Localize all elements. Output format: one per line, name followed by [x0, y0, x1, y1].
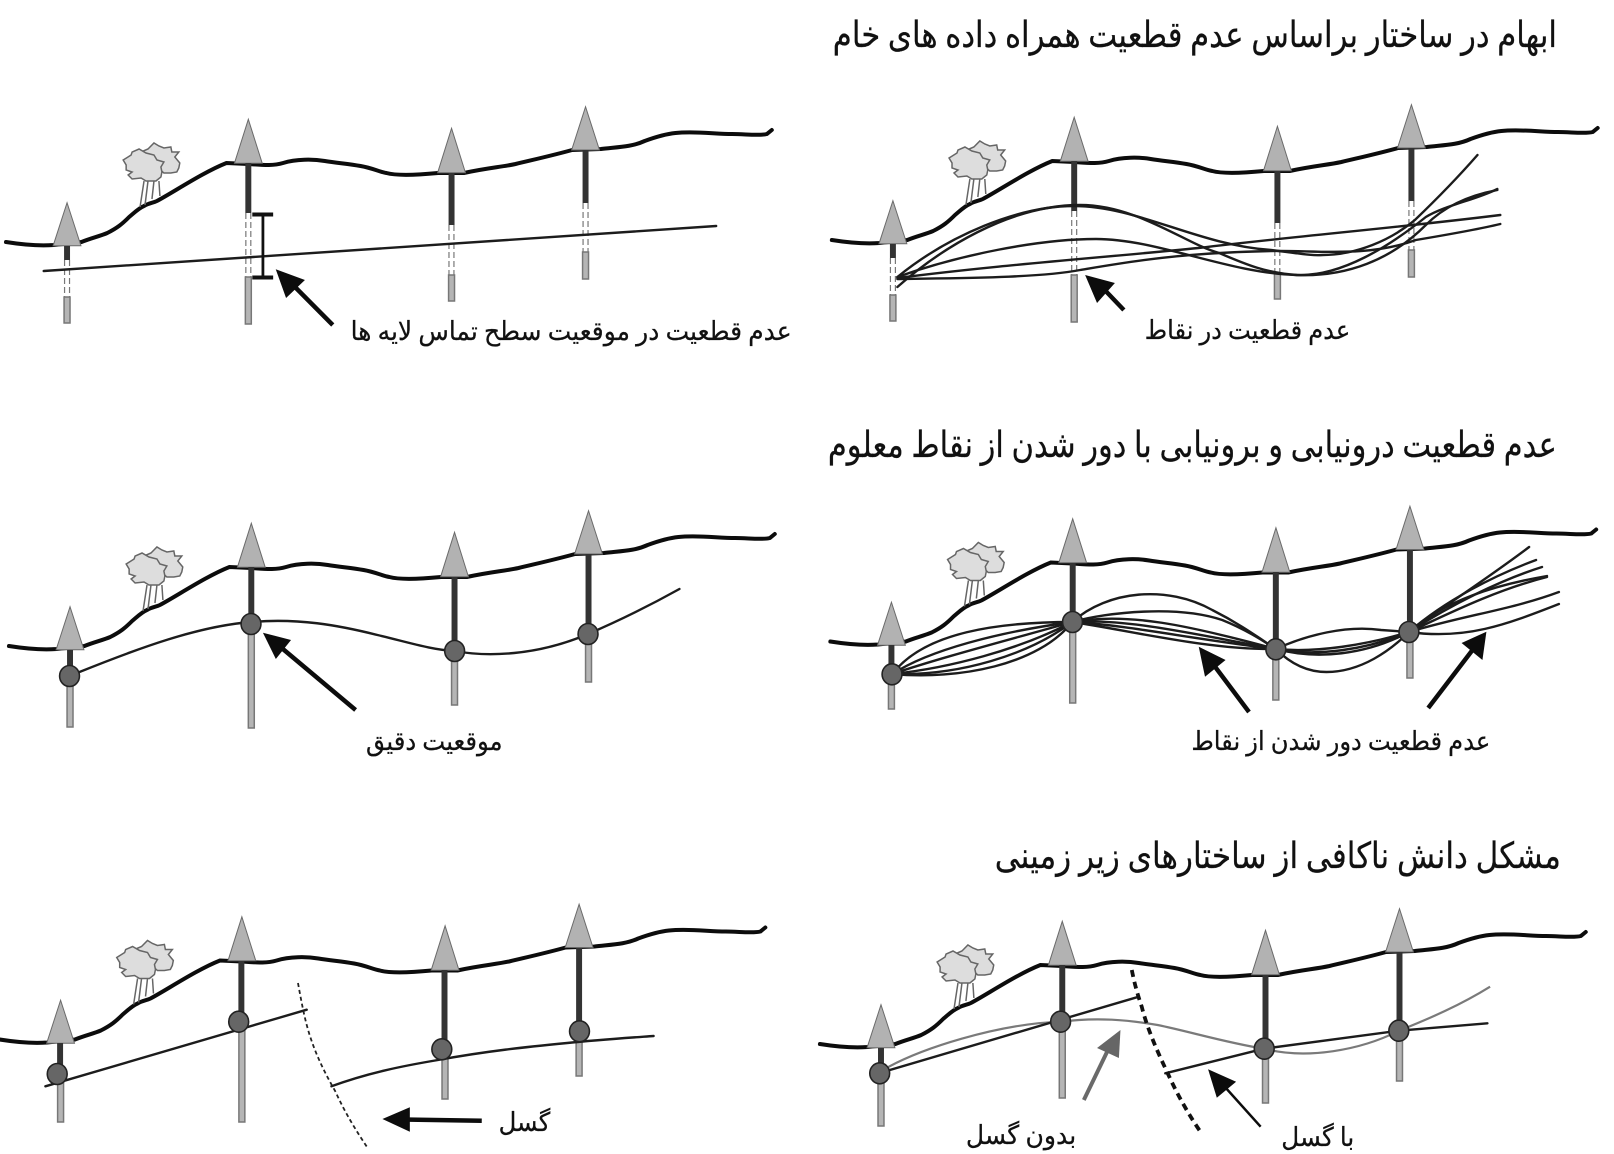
terrain with tree and survey markers	[820, 909, 1586, 1048]
arrow to point uncertainty	[1085, 275, 1124, 310]
terrain with tree and survey markers	[9, 511, 775, 650]
label: fault: گسل	[499, 1107, 551, 1137]
fault line	[298, 983, 367, 1147]
arrow to extrapolation spread	[1428, 632, 1486, 708]
possible interpretation curves	[897, 155, 1500, 287]
arrow to error bar	[276, 269, 333, 325]
horizon segment right of fault	[331, 1036, 654, 1086]
arrow to interpolation spread	[1199, 647, 1249, 712]
panel: uncertainty at points	[832, 105, 1598, 345]
gray curve without fault	[880, 987, 1490, 1072]
panel: uncertainty in contact surface position	[6, 107, 792, 347]
contact surface line	[44, 226, 716, 271]
error bar stem	[262, 214, 264, 278]
arrow to fault	[382, 1107, 482, 1132]
label: without fault: بدون گسل	[966, 1120, 1076, 1151]
terrain with tree and survey markers	[0, 904, 765, 1043]
black line with fault, left of fault	[880, 997, 1137, 1073]
black line with fault, right of fault	[1165, 1023, 1487, 1073]
arrow to exact position	[263, 633, 356, 710]
terrain with tree and survey markers	[832, 105, 1598, 244]
label: uncertainty moving away from points: عدم قطعیت دور شدن از نقاط	[1191, 727, 1490, 757]
terrain with tree and survey markers	[6, 107, 772, 246]
boreholes with dashed uncertain sections	[64, 150, 589, 324]
boreholes with dashed uncertain sections	[890, 148, 1414, 322]
boreholes	[888, 550, 1413, 709]
gray arrow: without fault	[1084, 1030, 1120, 1100]
black arrow: with fault	[1208, 1069, 1261, 1127]
boreholes	[58, 948, 582, 1122]
panel: exact position	[9, 511, 775, 757]
bundle of interpolation and extrapolation curves	[892, 547, 1559, 675]
horizon segment left of fault	[45, 1010, 307, 1086]
terrain with tree and survey markers	[830, 506, 1596, 645]
label: uncertainty at points: عدم قطعیت در نقاط	[1145, 316, 1350, 345]
label: contact surface uncertainty: عدم قطعیت در موقعیت سطح تماس لایه ها	[351, 317, 792, 347]
panel: uncertainty away from points	[830, 506, 1596, 757]
panel: with and without fault	[820, 909, 1586, 1152]
known points	[60, 614, 598, 686]
label: exact position: موقعیت دقیق	[366, 727, 503, 757]
boreholes	[878, 952, 1402, 1126]
known points	[47, 1011, 589, 1084]
error bar	[252, 214, 273, 278]
horizon curve	[79, 589, 679, 672]
boreholes	[67, 554, 592, 728]
known points	[870, 1011, 1409, 1084]
known points	[882, 612, 1419, 685]
thick dashed fault	[1132, 970, 1201, 1133]
label: with fault: با گسل	[1281, 1122, 1354, 1152]
panel: fault	[0, 904, 765, 1147]
